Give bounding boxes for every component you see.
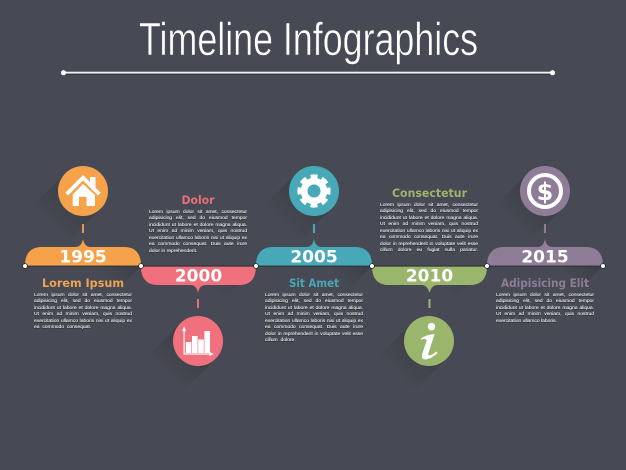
tab shadow: [1, 266, 141, 290]
text block: Sit Amet: Lorem ipsum dolor sit amet, consectetur: [265, 292, 363, 298]
text block: Consectetur: ea commodo consequat. Duis aute irure: [380, 235, 478, 240]
text block: Dolor: adipisicing elit, sed do eiusmod tempor: [149, 216, 247, 221]
icon: bar chart: [173, 316, 223, 366]
tab shadow: [399, 266, 487, 323]
icon: info: [404, 316, 454, 366]
text block: Consectetur: [380, 202, 478, 253]
text block: Consectetur: cillum dolore eu fugiat nulla pariatur.: [380, 248, 478, 253]
text block: Consectetur: Ut enim ad minim veniam, quis nostrud: [380, 222, 478, 227]
text block: Adipisicing Elit: Ut enim ad minim veniam, quis nostrud: [496, 312, 594, 317]
text block: Lorem Ipsum: incididunt ut labore et dolore magna aliqua.: [34, 306, 132, 311]
icon shadow: [377, 323, 447, 393]
text block: Adipisicing Elit: incididunt ut labore et dolore magna aliqua.: [496, 306, 594, 311]
text block: Consectetur: adipisicing elit, sed do eiusmod tempor: [380, 209, 478, 214]
text block: Dolor: exercitation ullamco laboris nisi ut aliquip ex: [149, 236, 247, 241]
text block: Sit Amet: incididunt ut labore et dolore magna aliqua.: [265, 306, 363, 311]
year: 2010: [406, 267, 453, 287]
text block: Sit Amet: adipisicing elit, sed do eiusmod tempor: [265, 299, 363, 304]
text block: Dolor: [149, 210, 247, 254]
icon shadow: [493, 173, 563, 243]
connector: [544, 224, 546, 233]
tab: [372, 266, 487, 293]
text block: Lorem Ipsum: ea commodo consequat.: [34, 325, 91, 330]
text block: Dolor: Lorem ipsum dolor sit amet, consectetur: [149, 210, 247, 214]
text block: Lorem Ipsum: Lorem ipsum dolor sit amet, consectetur: [34, 292, 132, 298]
connector: [197, 299, 199, 308]
text block: Consectetur: dolor in reprehenderit in voluptate velit esse: [380, 242, 478, 247]
text block: Lorem Ipsum: adipisicing elit, sed do eiusmod tempor: [34, 299, 132, 304]
text block: Consectetur: incididunt ut labore et dolore magna aliqua.: [380, 216, 478, 221]
tab: [25, 239, 141, 266]
tab shadow: [232, 266, 372, 290]
connector: [428, 299, 430, 308]
text block: Sit Amet: dolor in reprehenderit in voluptate velit esse: [265, 332, 363, 337]
text block: Dolor: Ut enim ad minim veniam, quis nostrud: [149, 229, 247, 234]
text block: Adipisicing Elit: adipisicing elit, sed do eiusmod tempor: [496, 299, 594, 304]
text block: Lorem Ipsum: exercitation ullamco laboris nisi ut aliquip ex: [34, 319, 132, 324]
text block: Lorem Ipsum: [34, 292, 132, 330]
connector: [313, 224, 315, 233]
heading: Consectetur: [392, 186, 467, 200]
text block: Lorem Ipsum: Ut enim ad minim veniam, quis nostrud: [34, 312, 132, 317]
text block: Adipisicing Elit: exercitation ullamco laboris.: [496, 319, 557, 324]
text block: Sit Amet: cillum dolore.: [265, 338, 296, 343]
tab: [141, 266, 256, 293]
tab shadow: [168, 266, 256, 323]
heading: Dolor: [182, 193, 215, 207]
text block: Adipisicing Elit: Lorem ipsum dolor sit amet, consectetur: [496, 292, 594, 298]
icon shadow: [262, 173, 332, 243]
text block: Sit Amet: exercitation ullamco laboris nisi ut aliquip ex: [265, 319, 363, 324]
timeline nodes: [23, 264, 605, 268]
text block: Sit Amet: Ut enim ad minim veniam, quis nostrud: [265, 312, 363, 317]
year: 2015: [521, 248, 569, 268]
heading: Lorem Ipsum: [42, 276, 124, 290]
text block: Dolor: incididunt ut labore et dolore magna aliqua.: [149, 223, 247, 228]
timeline line: [25, 266, 603, 267]
milestone 2000: [141, 193, 256, 393]
text block: Adipisicing Elit: [496, 292, 594, 324]
milestone 1995: [1, 166, 141, 290]
connector: [82, 224, 84, 233]
text block: Sit Amet: [265, 292, 363, 343]
heading: Adipisicing Elit: [501, 276, 589, 290]
tab: [256, 239, 372, 266]
text block: Sit Amet: ea commodo consequat. Duis aute irure: [265, 325, 363, 330]
title underline: [61, 70, 555, 75]
heading: Sit Amet: [289, 276, 339, 290]
tab: [487, 239, 603, 266]
year: 2000: [175, 267, 222, 287]
icon shadow: [31, 173, 101, 243]
year: 2005: [290, 248, 338, 268]
year: 1995: [59, 248, 107, 268]
text block: Dolor: dolor in reprehenderit.: [149, 249, 197, 254]
text block: Consectetur: exercitation ullamco laboris nisi ut aliquip ex: [380, 229, 478, 234]
milestone 2015: [463, 166, 603, 290]
text block: Consectetur: Lorem ipsum dolor sit amet, consectetur: [380, 202, 478, 208]
milestone 2005: [232, 166, 372, 290]
milestone 2010: [372, 186, 487, 393]
text block: Dolor: ea commodo consequat. Duis aute irure: [149, 242, 247, 247]
icon: gear: [289, 166, 339, 216]
tab shadow: [463, 266, 603, 290]
icon shadow: [146, 323, 216, 393]
icon: house: [58, 166, 108, 216]
title: Timeline Infographics: [139, 13, 478, 65]
icon: dollar coin: $: [537, 178, 553, 206]
